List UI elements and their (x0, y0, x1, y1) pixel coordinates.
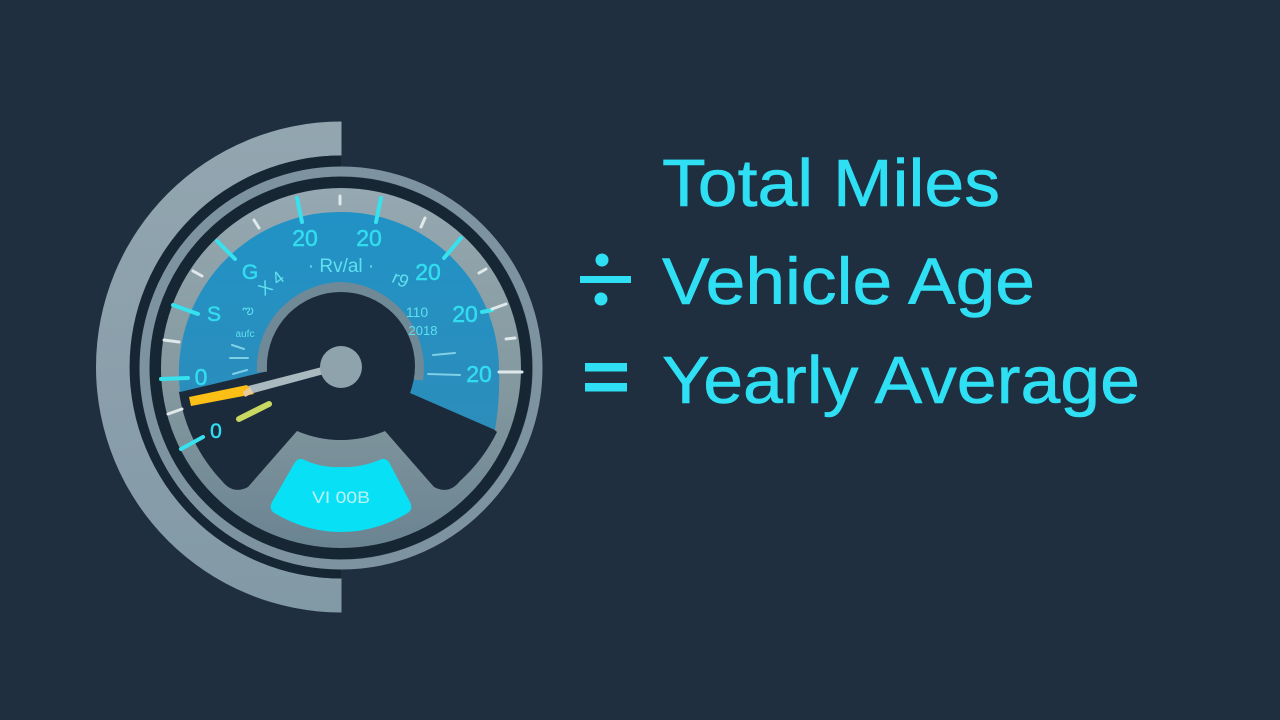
garbled dial lettering: aufc (236, 329, 254, 340)
garbled dial lettering: 110 (406, 304, 428, 320)
inner gray ring (262, 287, 419, 380)
garbled dial lettering: · Rv/al · (308, 256, 374, 277)
blue dial sector (179, 212, 499, 430)
garbled dial lettering (236, 256, 437, 340)
icon: equals sign (585, 363, 627, 392)
dial numerals: 20 (466, 361, 492, 387)
icon: division sign (580, 254, 631, 306)
garbled dial lettering: 2018 (409, 323, 437, 338)
outer half-ring arc (96, 122, 341, 612)
needle hub (320, 346, 362, 388)
dial numerals: 0 (195, 364, 207, 390)
speedometer gauge (130, 156, 538, 578)
line: yearly average: Yearly Average (662, 343, 1140, 418)
bezel rings (130, 156, 538, 578)
garbled dial lettering: X 4 (254, 267, 288, 299)
display text: VI 00B (312, 488, 370, 507)
dial numerals: G (242, 261, 258, 284)
gauge face (161, 188, 521, 548)
garbled dial lettering: r9 (389, 267, 412, 292)
major cyan ticks (161, 198, 492, 449)
dial numerals (195, 225, 492, 443)
dial numerals: 20 (292, 225, 318, 251)
dial numerals: 20 (356, 225, 382, 251)
dial numerals: 20 (452, 301, 478, 327)
dark lower dial area (179, 300, 497, 490)
cyan odometer display (271, 459, 411, 532)
line: total miles: Total Miles (662, 146, 1000, 221)
minor white ticks (164, 196, 522, 414)
garbled dial lettering: ఌ (242, 302, 254, 317)
dial numerals: 0 (210, 420, 222, 443)
line: vehicle age: Vehicle Age (662, 244, 1035, 318)
formula (580, 146, 1140, 418)
lime indicator mark (239, 404, 269, 419)
central dark hub (267, 292, 415, 440)
dial numerals: 20 (415, 259, 441, 285)
thin inner dial marks (230, 345, 460, 375)
dial numerals: S (207, 303, 221, 326)
needle (189, 367, 324, 406)
